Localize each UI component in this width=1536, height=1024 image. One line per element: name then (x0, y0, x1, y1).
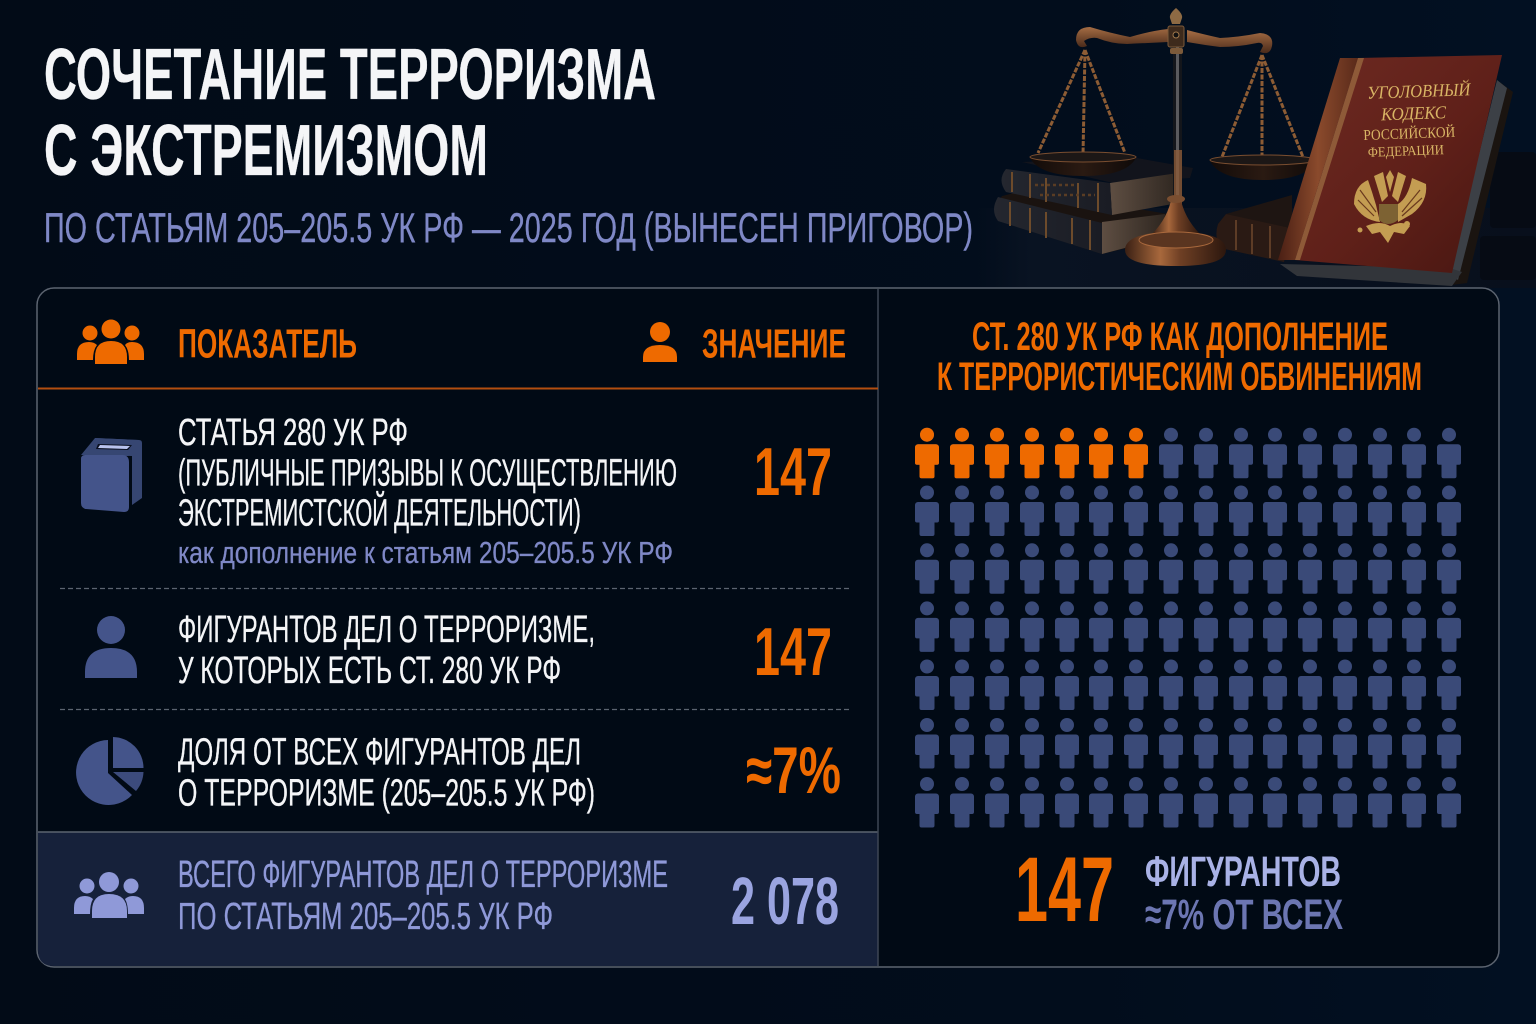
icon: balance scales (1030, 8, 1316, 266)
table header: ЗНАЧЕНИЕ (702, 320, 846, 366)
row: article 280 (81, 412, 832, 570)
icon: pie chart (76, 737, 144, 805)
row: share: ≈7% (746, 733, 841, 807)
pictogram summary: ФИГУРАНТОВ (1145, 848, 1341, 896)
icon: criminal code book (1278, 55, 1513, 286)
pictogram summary (1015, 839, 1343, 941)
icon: book (81, 438, 142, 512)
row: article 280: как дополнение к статьям 205–205.5 УК РФ (178, 535, 673, 570)
row: total: ВСЕГО ФИГУРАНТОВ ДЕЛ О ТЕРРОРИЗМЕ (178, 854, 668, 896)
icon: person (85, 616, 137, 678)
row: total: 2 078 (731, 864, 839, 939)
row: total: ПО СТАТЬЯМ 205–205.5 УК РФ (178, 896, 553, 938)
book cover text: КОДЕКС (1380, 102, 1447, 124)
table header: ПОКАЗАТЕЛЬ (178, 320, 357, 366)
row: article 280: ЭКСТРЕМИСТСКОЙ ДЕЯТЕЛЬНОСТИ) (178, 490, 581, 534)
book cover text: УГОЛОВНЫЙ (1367, 77, 1472, 103)
row: share: ДОЛЯ ОТ ВСЕХ ФИГУРАНТОВ ДЕЛ (178, 732, 581, 774)
title: СОЧЕТАНИЕ ТЕРРОРИЗМА (44, 35, 656, 115)
row: article 280: 147 (754, 434, 832, 510)
row: article 280: (ПУБЛИЧНЫЕ ПРИЗЫВЫ К ОСУЩЕСТВЛЕНИЮ (178, 452, 677, 494)
row: share: О ТЕРРОРИЗМЕ (205–205.5 УК РФ) (178, 772, 595, 814)
icon: orange person (643, 322, 677, 362)
icon: stacked old books (994, 158, 1292, 262)
pictogram summary: 147 (1015, 839, 1114, 941)
icon: orange group (77, 320, 144, 364)
title: С ЭКСТРЕМИЗМОМ (44, 111, 488, 191)
icon: double-headed eagle (1354, 170, 1426, 243)
book cover text: РОССИЙСКОЙ (1363, 124, 1456, 144)
row: defendants: ФИГУРАНТОВ ДЕЛ О ТЕРРОРИЗМЕ, (178, 609, 595, 651)
row: article 280: СТАТЬЯ 280 УК РФ (178, 412, 408, 454)
row: defendants: 147 (754, 614, 832, 690)
table header (77, 320, 846, 366)
book cover text: ФЕДЕРАЦИИ (1368, 143, 1444, 161)
subtitle: ПО СТАТЬЯМ 205–205.5 УК РФ — 2025 ГОД (ВЫНЕСЕН ПРИГОВОР) (44, 204, 973, 251)
row: defendants (85, 609, 832, 692)
right panel heading (937, 315, 1422, 399)
illustration: scales, books and criminal code (975, 8, 1536, 288)
pictogram: 7 of 112 people highlighted (915, 428, 1461, 828)
row: defendants: У КОТОРЫХ ЕСТЬ СТ. 280 УК РФ (178, 650, 561, 692)
row: share (76, 732, 841, 814)
icon: group (74, 872, 144, 918)
panel: data table and pictogram (37, 288, 1499, 967)
total row highlight (38, 832, 878, 966)
book cover text (1361, 77, 1474, 161)
row: total (74, 854, 839, 939)
pictogram summary: ≈7% ОТ ВСЕХ (1145, 891, 1343, 939)
icon: dark books on the right edge (1480, 152, 1536, 280)
title (44, 35, 656, 191)
highlighted people (915, 428, 1148, 478)
